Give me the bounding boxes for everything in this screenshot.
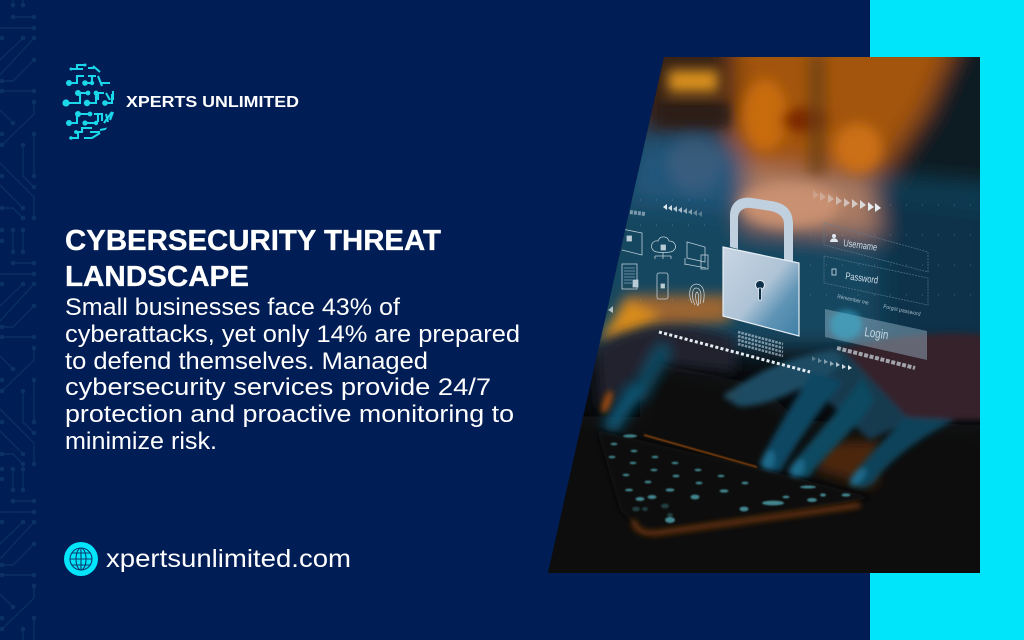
body text: cyberattacks, yet only 14% are prepared xyxy=(65,321,520,348)
dark lower area xyxy=(548,378,785,572)
login form: Forgot password xyxy=(883,304,921,318)
right hand xyxy=(723,333,985,489)
photo: hands typing with security interface xyxy=(548,57,980,573)
website address: xpertsunlimited.com xyxy=(106,545,351,573)
logo xyxy=(62,64,299,140)
circuit pattern strip xyxy=(0,0,36,640)
title: LANDSCAPE xyxy=(65,261,249,293)
icons: devices, cloud and fingerprint xyxy=(622,229,708,306)
login form xyxy=(824,223,928,360)
login form: Password xyxy=(845,271,879,287)
logo wordmark: XPERTS UNLIMITED xyxy=(126,94,299,111)
photo base xyxy=(540,50,990,580)
blurred background colours xyxy=(596,57,980,364)
icon: circuit globe xyxy=(62,64,113,140)
body text xyxy=(65,294,520,455)
login form: Remember me xyxy=(837,294,869,307)
body text: minimize risk. xyxy=(65,428,217,455)
interface overlay xyxy=(608,190,980,372)
laptop keyboard xyxy=(597,430,874,536)
body text: Small businesses face 43% of xyxy=(65,294,400,321)
glow behind right hand xyxy=(815,440,880,488)
left hand xyxy=(596,326,735,425)
title xyxy=(65,225,441,293)
body text: to defend themselves. Managed xyxy=(65,348,428,375)
cyan side panel xyxy=(870,0,1024,640)
dotted progress rows xyxy=(630,212,915,372)
icon: globe xyxy=(64,542,98,576)
title: CYBERSECURITY THREAT xyxy=(65,225,441,257)
body text: cybersecurity services provide 24/7 xyxy=(65,374,491,401)
body text: protection and proactive monitoring to xyxy=(65,401,514,428)
icon: padlock xyxy=(723,198,799,336)
arrow rows xyxy=(608,190,881,370)
faint dot grid xyxy=(640,200,980,300)
login form: Login xyxy=(864,324,889,342)
login form: Username xyxy=(843,238,878,254)
website footer xyxy=(64,542,351,576)
